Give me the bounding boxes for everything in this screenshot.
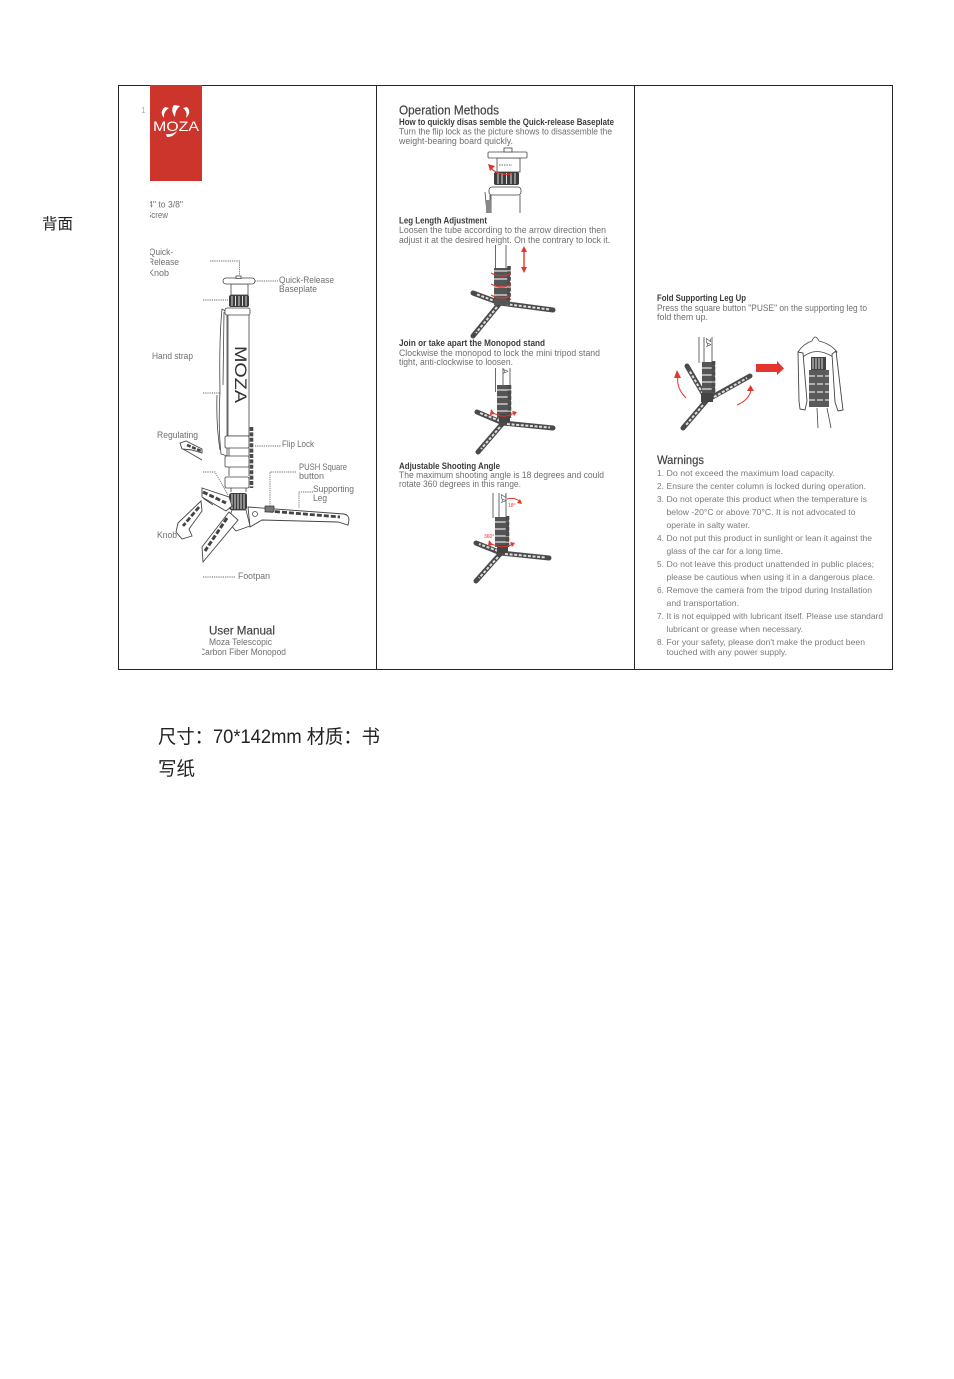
- label: quick-release knob: [150, 248, 179, 276]
- section: fold supporting leg: fold them up.: [657, 312, 708, 322]
- label: baseplate: Baseplate: [279, 284, 317, 294]
- section: join monopod: Join or take apart the Monopod stand: [399, 338, 545, 348]
- subtitle: [202, 638, 286, 657]
- label: footpan: Footpan: [238, 571, 270, 581]
- illustration: join stand: [477, 368, 553, 452]
- manual sheet frame: [118, 86, 892, 670]
- flip locks: [225, 427, 252, 492]
- section: join monopod: Clockwise the monopod to lock the mini tripod stand: [399, 348, 600, 358]
- warnings list: glass of the car for a long time.: [666, 546, 783, 556]
- red logo block: MOZA: [153, 118, 200, 134]
- label: supporting leg: Supporting: [313, 484, 354, 494]
- warnings list: operate in salty water.: [666, 520, 750, 530]
- section: shooting angle: rotate 360 degrees in this range.: [399, 479, 521, 489]
- warnings list: 8.: [657, 637, 664, 647]
- illustration: shooting angle: 360°: [484, 534, 494, 540]
- label: baseplate: Quick-Release: [279, 275, 334, 285]
- warnings list: Do not operate this product when the temperature is: [666, 494, 867, 504]
- label: push square button: button: [299, 471, 324, 481]
- warnings list: 3.: [657, 494, 664, 504]
- lower leg: [202, 512, 238, 562]
- panel: cover and parts diagram: [141, 85, 354, 657]
- label: screw adapter: 1/4" to 3/8": [141, 200, 183, 210]
- illustration: shooting angle: ZA: [499, 494, 506, 503]
- warnings list: Remove the camera from the tripod during Installation: [666, 585, 872, 595]
- illustration: leg length tripod: [473, 245, 553, 336]
- label: supporting leg: [313, 484, 354, 503]
- warnings list: It is not equipped with lubricant itself. Please use standard: [666, 611, 883, 621]
- illustration: legs unfolded: [674, 337, 754, 428]
- label: regulating: Regulating: [157, 430, 198, 440]
- panel: operation methods: [398, 104, 614, 581]
- red logo block: [150, 85, 202, 181]
- section: shooting angle: The maximum shooting angle is 18 degrees and could: [399, 470, 604, 480]
- red double arrow: [523, 250, 525, 269]
- label: hand strap: Hand strap: [152, 351, 193, 361]
- regulating part fragment: [180, 441, 202, 453]
- leader lines: [203, 261, 313, 577]
- heading: Operation Methods: [399, 104, 499, 118]
- hub: [228, 510, 250, 531]
- section: leg length: Loosen the tube according to the arrow direction then: [399, 225, 606, 235]
- section: join monopod: [399, 338, 600, 367]
- label: quick-release knob: Knob: [148, 268, 169, 278]
- label: knob: Knob: [157, 530, 177, 540]
- label: screw adapter: [150, 201, 183, 218]
- label: flip lock: Flip Lock: [282, 439, 315, 449]
- upper left leg: [202, 488, 232, 511]
- warnings list: 2.: [657, 481, 664, 491]
- warnings list: Ensure the center column is locked during operation.: [666, 481, 866, 491]
- note: size and material: [158, 726, 380, 780]
- panel: folding and warnings: [657, 293, 883, 657]
- section: fold supporting leg: Fold Supporting Leg Up: [657, 293, 746, 303]
- warnings list: Do not leave this product unattended in public places;: [666, 559, 874, 569]
- section: leg length: [399, 216, 610, 245]
- label: supporting leg: Leg: [313, 493, 327, 503]
- label: push square button: PUSH Square: [299, 462, 347, 472]
- label: baseplate: [279, 275, 334, 294]
- section: quick-release baseplate: weight-bearing board quickly.: [398, 136, 513, 146]
- warnings list: below -20°C or above 70°C. It is not advocated to: [666, 507, 856, 517]
- warnings list: Do not exceed the maximum load capacity.: [666, 468, 835, 478]
- subtitle: Moza Telescopic: [209, 637, 273, 647]
- illustration: baseplate removal: [485, 148, 527, 213]
- section: quick-release baseplate: [398, 117, 614, 146]
- section: quick-release baseplate: How to quickly disas semble the Quick-release Baseplate: [399, 117, 614, 127]
- label: quick-release knob: Quick-: [149, 247, 173, 257]
- warnings list: 6.: [657, 585, 664, 595]
- title: user manual: User Manual: [209, 626, 275, 638]
- section: shooting angle: [399, 461, 604, 489]
- warnings list: touched with any power supply.: [666, 647, 787, 657]
- note: size and material: 写纸: [158, 758, 195, 780]
- section: join monopod: tight, anti-clockwise to loosen.: [399, 357, 513, 367]
- section: fold supporting leg: Press the square button "PUSE" on the supporting leg to: [657, 303, 867, 313]
- arrow: big red right: [756, 361, 784, 375]
- label: quick-release knob: Release: [148, 257, 179, 267]
- warnings list: please be cautious when using it in a dangerous place.: [666, 572, 875, 582]
- illustration: shooting angle: 18°: [508, 503, 516, 509]
- illustration: legs folded: [798, 337, 843, 428]
- warnings list: Do not put this product in sunlight or lean it against the: [666, 533, 872, 543]
- folded leg fragment with footpad: [176, 501, 202, 539]
- warnings list: lubricant or grease when necessary.: [666, 624, 803, 634]
- section: leg length: Leg Length Adjustment: [399, 216, 487, 226]
- warnings list: 5.: [657, 559, 664, 569]
- illustration: monopod on tripod: [176, 276, 349, 562]
- illustration: join stand: A: [501, 369, 508, 374]
- page number mark: 1: [141, 106, 146, 115]
- label: push square button: [299, 462, 347, 481]
- subtitle: Carbon Fiber Monopod: [199, 647, 286, 657]
- note: size and material: 尺寸：70*142mm 材质：书: [158, 726, 380, 748]
- right leg: [248, 507, 349, 527]
- warnings list: [657, 468, 883, 657]
- column knob: [229, 493, 247, 510]
- section: shooting angle: Adjustable Shooting Angle: [399, 461, 500, 471]
- illustration: legs unfolded: ZA: [704, 338, 711, 347]
- section: leg length: adjust it at the desired height. On the contrary to lock it.: [399, 235, 610, 245]
- warnings list: and transportation.: [666, 598, 739, 608]
- warnings list: For your safety, please don't make the product been: [666, 637, 865, 647]
- warnings list: 1.: [657, 468, 664, 478]
- section: quick-release baseplate: Turn the flip lock as the picture shows to disassemble the: [399, 126, 612, 136]
- warnings heading: Warnings: [657, 455, 704, 467]
- warnings list: 7.: [657, 611, 664, 621]
- warnings list: 4.: [657, 533, 664, 543]
- illustration: shooting angle: [476, 493, 549, 581]
- product name on tube: MOZA: [231, 346, 250, 404]
- side label: back: 背面: [42, 215, 73, 233]
- label: screw adapter: Screw: [146, 210, 169, 220]
- section: fold supporting leg: [657, 293, 867, 322]
